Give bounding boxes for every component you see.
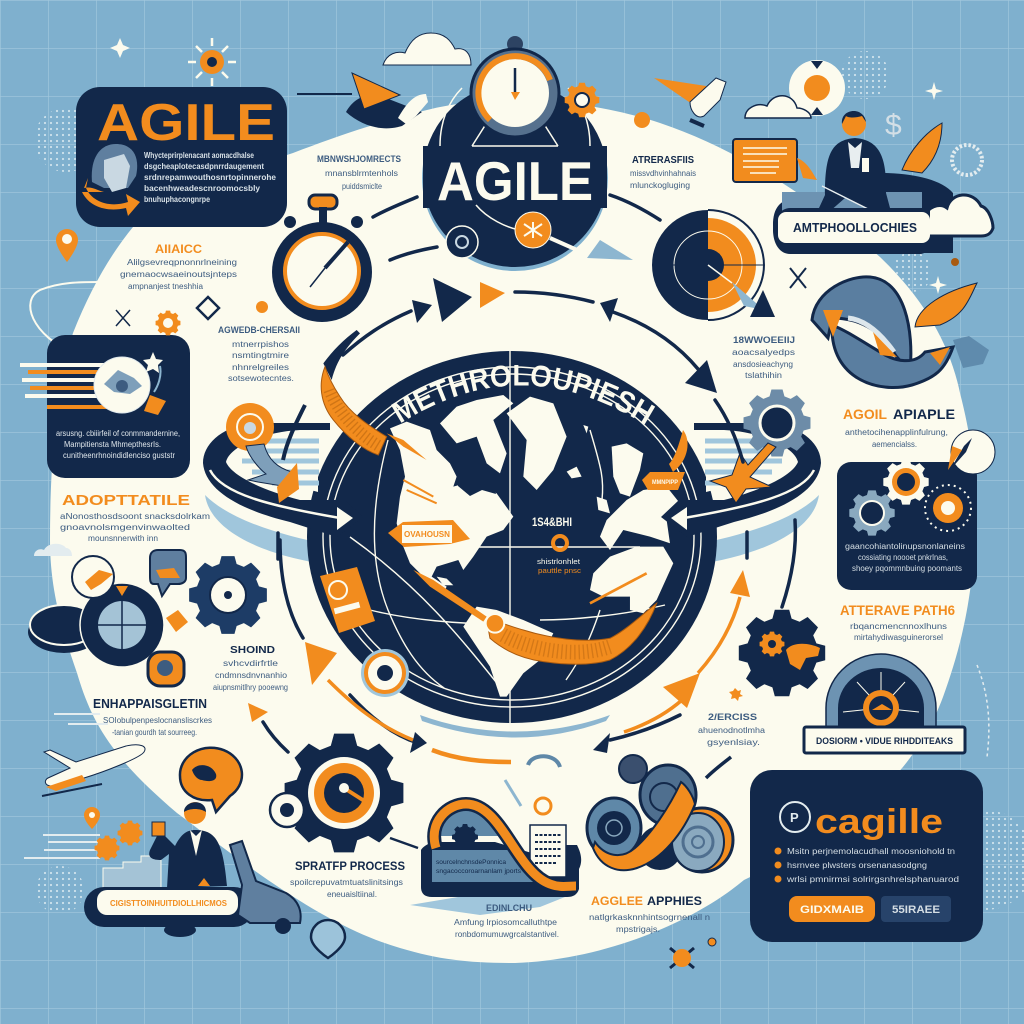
badge lower left — [361, 649, 409, 697]
light ring band — [205, 495, 819, 565]
globe group: METHROLOUPIESH — [391, 365, 656, 424]
text: ENHAPPASGLETIN — [93, 696, 212, 737]
text: EDINLCHU: EDINLCHU — [486, 903, 532, 913]
text: MBNWSH: mnansblrmtenhols — [325, 169, 398, 178]
icon: lens disc left — [28, 550, 188, 686]
icon: blue pointer — [550, 238, 633, 260]
text: ADOPTATILE — [60, 492, 210, 543]
text: ADOPTATILE: aNonosthosdsoont snacksdolrkam — [60, 512, 210, 521]
panel: semi dial right — [804, 654, 965, 753]
text: AGWEDB — [218, 325, 300, 383]
text: EDINLCHU: ronbdomumuwgrcalstantivel. — [455, 930, 559, 939]
panel: top left AGILE card — [76, 87, 287, 227]
text: bacenhweadescnroomocsbly — [144, 184, 261, 193]
panel: bottom left businessman — [84, 802, 301, 937]
bullet text: wrlsi pmnirmsi solrirgsnhrelsphanuarod — [786, 875, 959, 884]
icon: feather — [902, 123, 942, 173]
label: CIGISTTOINHUITDIOLLHICMOS — [110, 899, 228, 908]
navy stroke — [283, 405, 305, 460]
text: 2/ERCISS — [698, 712, 766, 747]
icon: location pin left — [56, 229, 78, 262]
text: left AIIACC: gnemaocwsaeinoutsjnteps — [120, 270, 237, 279]
text: left AIIACC: Alilgsevreqpnonnrlneining — [127, 258, 237, 267]
note — [733, 139, 797, 182]
text: AGGLEE APPHIES: mpstrigajs. — [616, 925, 660, 934]
text: 2/ERCISS: 2/ERCISS — [708, 712, 757, 722]
text: SHOIND: aiupnsmitlhry pooewng — [213, 683, 288, 692]
text: ENHAPPASGLETIN: ENHAPPAISGLETIN — [93, 696, 207, 711]
icon: loop line — [30, 282, 100, 355]
text: SHOIND: svhcvdirfrtle — [223, 659, 279, 668]
text: AGGLEE APPHIES: AGGLEE — [591, 894, 643, 908]
buildings — [103, 856, 161, 888]
text: ALTERAVE PATHS: rbqancmencnnoxlhuns — [850, 622, 947, 631]
icon: small cloud left — [34, 544, 72, 556]
text: ATRERASFIS: missvdhvinhahnais — [630, 169, 696, 178]
text: SPRATFP PROCESS: spoilcrepuvatmtuatslinitsings — [290, 878, 403, 887]
text: ALTERAVE PATHS: ATTERAVE PATH6 — [840, 602, 955, 618]
text: SPRATFP PROCESS: SPRATFP PROCESS — [295, 859, 405, 873]
globe sphere — [307, 351, 717, 723]
arrows around globe — [263, 195, 795, 752]
heading: cagille — [815, 803, 943, 841]
panel: bottom right cagille — [750, 770, 983, 942]
icon: sun — [789, 60, 845, 116]
text: AGAIL APIAPLE: APIAPLE — [893, 406, 955, 422]
text: left AIIACC: ampnanjest tneshhia — [128, 282, 204, 291]
text: SHOIND — [213, 645, 288, 692]
icon: pin — [84, 807, 100, 829]
icon: top cloud — [383, 33, 471, 65]
text: Mampitiensta MhmepthesrIs. — [64, 440, 161, 449]
icon: white gear — [952, 145, 982, 175]
text: SPRATFP PROCESS: eneuaisltiinal. — [327, 890, 377, 899]
globe land — [390, 395, 680, 697]
icon: globe pin: pauttle pnsc — [538, 568, 582, 575]
text: SPRATFP PROCESS — [290, 859, 405, 899]
text: srdnrepamwouthosnrtopinnerohe — [144, 173, 277, 182]
icon: dollar: $ — [885, 109, 902, 142]
orange tab — [277, 463, 299, 503]
ribbon tip right — [669, 430, 688, 472]
text: shoey pqommnbuing poomants — [852, 564, 962, 573]
icon: orange disc — [226, 403, 274, 451]
text: ALTERAVE PATHS: mirtahydiwasguinerorsel — [854, 633, 943, 642]
button — [789, 896, 875, 922]
top clock and AGILE hub — [422, 36, 633, 271]
text: AGWEDB: AGWEDB-CHERSAII — [218, 325, 300, 335]
text: ENHAPPASGLETIN: -tanian gourdh tat sourreeg. — [112, 728, 197, 737]
text: right mid: 18WWOEEIIJ — [733, 335, 795, 345]
text: SHOIND: SHOIND — [230, 645, 275, 656]
text — [56, 429, 180, 460]
panel: top right businessman — [733, 60, 993, 254]
icon: dashed arrow right — [977, 665, 989, 757]
decorative lines bottom left — [24, 835, 100, 858]
text: cunitheenrhnoindidlenciso guststr — [63, 451, 175, 460]
text: Whycteprirplenacant aomacdhalse — [144, 151, 254, 160]
text: EDINLCHU: Amfung lrpiosomcalluthtpe — [454, 918, 558, 927]
globe grid — [323, 347, 701, 723]
icon: orange wave box — [410, 756, 581, 915]
cream circle — [50, 100, 975, 963]
text: AGWEDB: sotsewotecntes. — [228, 374, 294, 383]
orange ribbon top — [321, 330, 657, 664]
tag lower — [320, 567, 375, 633]
icon: cloud — [745, 96, 811, 118]
seat — [773, 173, 953, 253]
text: EDINLCHU — [454, 903, 559, 939]
man — [819, 111, 890, 212]
text: bnuhuphacongnrpe — [144, 195, 210, 204]
left side ring arrow — [203, 403, 363, 537]
globe group — [307, 330, 717, 738]
icon: hub small wheel — [446, 226, 478, 258]
text: AGAIL APIAPLE: aemencialss. — [872, 440, 917, 449]
icons above — [505, 756, 560, 814]
orange accent — [729, 688, 743, 701]
icon: hub badge — [515, 212, 551, 248]
man — [149, 802, 227, 888]
decorative lines left — [54, 714, 108, 724]
label bar — [84, 887, 254, 927]
text: right mid — [732, 335, 795, 380]
text: AGGLEE APPHIES: natlgrkasknnhintsogrnenall n — [589, 913, 710, 922]
small accents — [110, 38, 959, 968]
globe label: 1S4&BHI — [532, 515, 572, 529]
bullet text — [786, 847, 959, 884]
text: cossiating noooet pnkrlnas, — [858, 553, 948, 562]
text: right mid: aoacsalyedps — [732, 348, 795, 357]
text: AGWEDB: mtnerrpishos — [232, 340, 289, 349]
icon: plane — [42, 745, 145, 796]
text — [144, 151, 277, 204]
icon: hub clock — [471, 36, 559, 137]
dark inland marks — [456, 464, 496, 496]
text: MBNWSH: puiddsmiclte — [342, 182, 382, 191]
globe heading — [400, 385, 650, 428]
text: ATRERASFIS — [630, 155, 696, 190]
arrowheads and orange arrows — [248, 278, 750, 762]
arrow blue — [246, 444, 292, 486]
icon: orange gear right — [739, 610, 825, 696]
text: AGWEDB: nsmtingtmire — [232, 351, 290, 360]
label box — [773, 208, 930, 254]
box text — [436, 860, 521, 875]
icon: orange swirl top right — [812, 277, 989, 388]
icon: stopwatch — [272, 195, 372, 322]
hub shadow — [422, 85, 608, 271]
panel: semi dial right: DOSIORM • VIDUE RIHDDITEAKS — [816, 736, 953, 747]
text: ADOPTATILE: mounsnnerwith inn — [88, 534, 158, 543]
text: AGAIL APIAPLE: anthetocihenapplinfulrung, — [845, 428, 948, 437]
panel: right gears card — [837, 459, 977, 590]
icon: bird top right — [654, 78, 726, 126]
icon: badge: P — [790, 810, 799, 825]
icon: badge — [780, 802, 810, 832]
text: ATRERASFIS: mlunckogluging — [630, 181, 690, 190]
icon: bird top — [297, 73, 428, 128]
icon: speech bubble — [180, 748, 242, 812]
button: GIDXMAIB — [800, 904, 864, 916]
icon: top left sun — [188, 38, 236, 86]
icon: coils — [587, 755, 733, 872]
icon: gears — [849, 459, 971, 536]
box text: sngacoccoroarnanlam jports — [436, 869, 521, 875]
tag left: OVAHOUSN — [404, 530, 450, 539]
text: right mid: ansdosieachyng — [733, 360, 793, 369]
text: ADOPTATILE: gnoavnolsmgenvinwaolted — [60, 523, 190, 532]
orange star arrow — [710, 443, 776, 503]
tag right: MMNPIPP — [652, 480, 678, 486]
icon: compass — [948, 430, 995, 474]
text: 2/ERCISS: gsyenlsiay. — [707, 738, 760, 747]
icon: globe pin: shistrlonhlet — [537, 559, 580, 566]
text: dsgcheaplotecasdpnrrdaugement — [144, 162, 264, 171]
icon: location pin bottom — [311, 920, 345, 958]
wheel — [164, 923, 196, 937]
tag left — [388, 520, 470, 547]
icon: gear left — [189, 556, 267, 634]
text: ALTERAVE PATHS — [840, 602, 955, 642]
text: ATRERASFIS: ATRERASFIIS — [632, 155, 694, 166]
icon: radar dial — [652, 210, 775, 320]
box text: sourcelnchnsdePonnica — [436, 860, 507, 866]
right side ring arrow — [661, 390, 821, 537]
tag right — [642, 472, 685, 490]
button — [881, 896, 951, 922]
text: ENHAPPASGLETIN: SOIobulpenpeslocnansliscrkes — [103, 716, 212, 725]
text: MBNWSH: MBNWSHJOMRECTS — [317, 154, 401, 164]
icon: lens — [94, 357, 150, 413]
text: AGGLEE APPHIES: APPHIES — [647, 894, 702, 908]
streaks — [20, 365, 132, 407]
icon: globe pin — [537, 536, 582, 575]
text: left AIIACC: AIIAICC — [155, 242, 202, 256]
text: left AIIACC — [120, 242, 237, 291]
text: MBNWSH — [317, 154, 401, 191]
hub heading: AGILE — [437, 150, 593, 212]
text: 2/ERCISS: ahuenodnotlmha — [698, 726, 766, 735]
bullet text: Msitn perjnemolacudhall moosniohold tn — [787, 847, 955, 856]
text: AGAIL APIAPLE: AGOIL — [843, 406, 887, 422]
text: AGAIL APIAPLE — [843, 406, 955, 449]
label: AMTPHOOLLOCHIES — [793, 220, 917, 235]
text: arsusng. cbiiirfeil of conmmandernine, — [56, 429, 180, 438]
text: right mid: tslathihin — [745, 371, 782, 380]
text: AGWEDB: nhnrelgreiles — [232, 363, 289, 372]
icon: center bottom gear — [270, 734, 418, 852]
text: AGGLEE APPHIES — [589, 894, 710, 934]
icon: gear on ring — [744, 390, 810, 456]
text — [845, 542, 965, 573]
icon: small gear — [565, 83, 599, 117]
hub disc — [423, 83, 607, 267]
text: ADOPTATILE: ADOPTTATILE — [62, 492, 190, 509]
icon: portrait — [82, 144, 140, 216]
text: SHOIND: cndmnsdnvnanhio — [215, 671, 288, 680]
icon: cloud right — [925, 195, 993, 236]
panel: left card — [20, 335, 190, 478]
heading: AGILE — [97, 94, 275, 152]
button: 55IRAEE — [892, 904, 940, 916]
bullet text: hsrnvee plwsters orsenanasodgng — [787, 861, 927, 870]
text: gaancohiantolinupsnonlaneins — [845, 542, 965, 551]
scooter — [230, 841, 301, 923]
